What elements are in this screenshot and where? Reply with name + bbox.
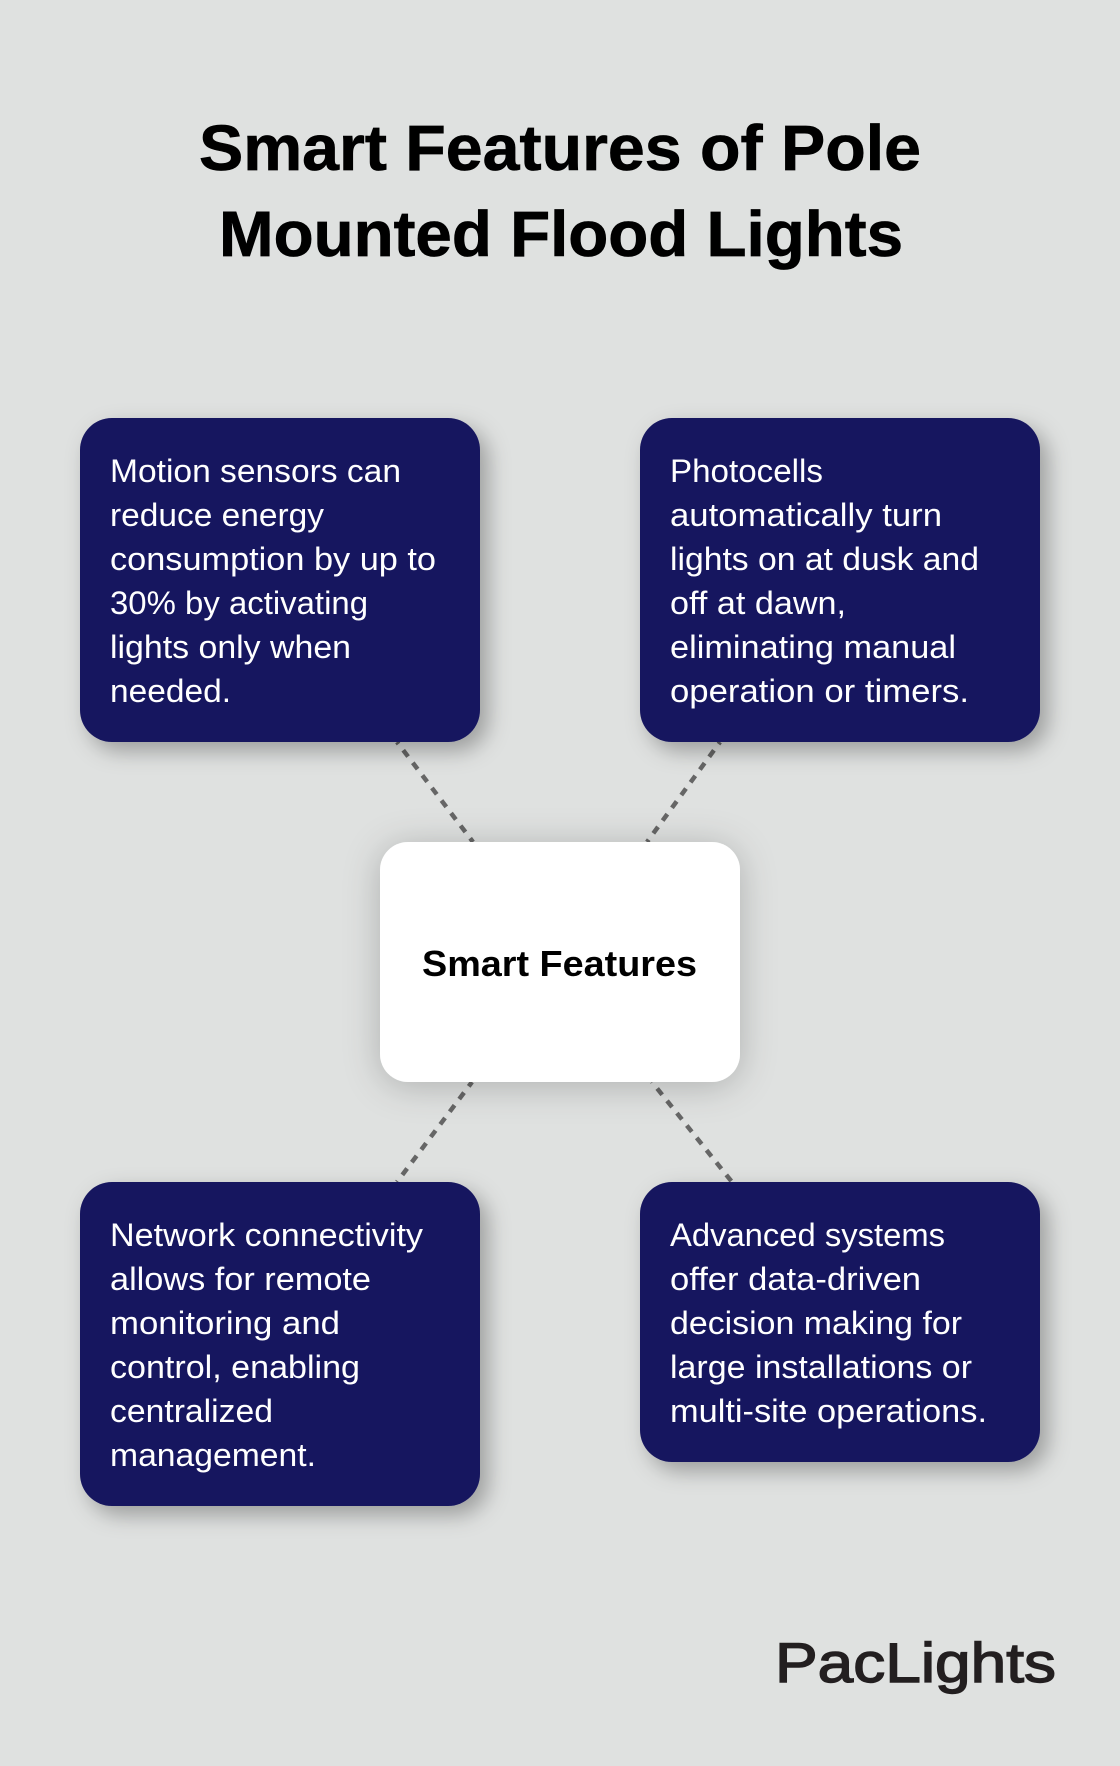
panel: motion sensors: reduce energy <box>110 497 324 533</box>
panel: network connectivity <box>80 1182 480 1506</box>
panel: motion sensors: consumption by up to <box>110 541 436 577</box>
panel: photocells: eliminating manual <box>670 629 956 665</box>
panel: photocells: Photocells <box>670 453 823 489</box>
panel: advanced systems: offer data-driven <box>670 1261 921 1297</box>
panel: network connectivity: centralized <box>110 1393 273 1429</box>
panel: photocells: operation or timers. <box>670 673 969 709</box>
panel: motion sensors: lights only when <box>110 629 351 665</box>
title <box>199 112 921 270</box>
panel: advanced systems: decision making for <box>670 1305 962 1341</box>
panel: photocells: off at dawn, <box>670 585 846 621</box>
connectors: dashed lines <box>397 742 732 1182</box>
panel: center hub: Smart Features <box>422 943 697 984</box>
title: Mounted Flood Lights <box>219 198 903 270</box>
panel: network connectivity: allows for remote <box>110 1261 371 1297</box>
panel: motion sensors: 30% by activating <box>110 585 368 621</box>
panel: network connectivity: Network connectivity <box>110 1217 423 1253</box>
panel: advanced systems: Advanced systems <box>670 1217 945 1253</box>
logo: PacLights: PacLights <box>775 1631 1056 1694</box>
title: Smart Features of Pole <box>199 112 921 184</box>
panel: photocells: automatically turn <box>670 497 942 533</box>
panel: center hub <box>380 842 740 1082</box>
panel: network connectivity: control, enabling <box>110 1349 360 1385</box>
panel: motion sensors: needed. <box>110 673 231 709</box>
panel: photocells <box>640 418 1040 742</box>
panel: network connectivity: monitoring and <box>110 1305 340 1341</box>
panel: advanced systems: multi-site operations. <box>670 1393 987 1429</box>
panel: advanced systems <box>640 1182 1040 1462</box>
panel: advanced systems: large installations or <box>670 1349 972 1385</box>
panel: network connectivity: management. <box>110 1437 316 1473</box>
panel: motion sensors <box>80 418 480 742</box>
panel: photocells: lights on at dusk and <box>670 541 979 577</box>
panel: motion sensors: Motion sensors can <box>110 453 401 489</box>
